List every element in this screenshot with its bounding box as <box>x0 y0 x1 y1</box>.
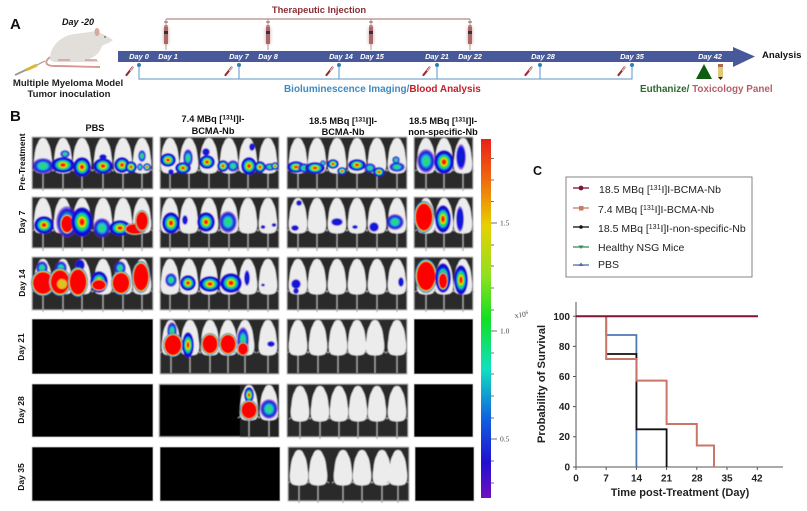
y axis title: Probability of Survival <box>536 325 548 443</box>
axis tick labels <box>553 312 763 484</box>
icon: rat with syringe <box>15 28 113 75</box>
PBS curve <box>606 316 636 467</box>
legend: I]I-BCMA-Nb <box>655 204 714 216</box>
imaging panel: non-specific pre-treatment <box>414 137 474 191</box>
colour scale bar: 1.0 <box>500 326 510 336</box>
colour scale bar: 0.5 <box>500 434 510 444</box>
timeline day labels: Day 42 <box>698 52 723 61</box>
imaging panel: 18.5 MBq day 21 <box>287 319 408 374</box>
imaging panel: PBS day 7 <box>32 197 153 251</box>
axis tick labels: 21 <box>661 474 672 484</box>
imaging panel: 7.4 MBq day 14 <box>159 257 279 312</box>
column headings: I]I- <box>233 114 244 124</box>
timeline arrow <box>118 47 755 67</box>
imaging panel: PBS day 35 <box>32 447 153 501</box>
timeline day labels: Day 15 <box>360 52 385 61</box>
column headings: BCMA-Nb <box>192 126 235 136</box>
imaging panel: PBS day 21 <box>32 319 153 374</box>
column headings: 18.5 MBq [ <box>309 116 355 126</box>
column headings: 7.4 MBq [ <box>182 114 222 124</box>
legend <box>566 177 752 277</box>
18.5 MBq curve <box>576 315 758 317</box>
imaging bracket <box>137 63 634 79</box>
icons: blood tubes <box>126 67 625 75</box>
model caption: Multiple Myeloma Model <box>13 78 123 89</box>
colour scale bar: x10 <box>514 310 526 320</box>
axis tick labels: 0 <box>573 474 579 484</box>
timeline day labels: Day 21 <box>425 52 449 61</box>
column headings: BCMA-Nb <box>322 127 365 137</box>
survival chart <box>536 302 783 499</box>
timeline day labels: Day 1 <box>158 52 178 61</box>
imaging panel: 18.5 MBq day 14 <box>287 257 408 312</box>
imaging panel: 7.4 MBq day 28 <box>159 384 280 438</box>
7.4 MBq curve <box>606 316 714 467</box>
legend: 7.4 MBq [ <box>598 204 643 216</box>
row labels: Day 35 <box>16 463 26 491</box>
column headings <box>86 114 478 137</box>
axis tick labels: 80 <box>559 342 570 353</box>
axis tick labels: 100 <box>553 312 570 323</box>
analysis label: Analysis <box>762 50 801 61</box>
axis tick labels: 0 <box>564 462 570 474</box>
imaging panel: 7.4 MBq pre-treatment <box>159 137 279 191</box>
axis tick labels: 7 <box>603 474 609 484</box>
euthanize toxicology caption: Euthanize/ Toxicology Panel <box>640 84 773 95</box>
model caption: Tumor inoculation <box>28 89 111 100</box>
column headings: 131 <box>355 116 366 124</box>
column headings: I]I- <box>366 116 377 126</box>
timeline day labels: Day 0 <box>129 52 150 61</box>
therapeutic injection heading: Therapeutic Injection <box>272 4 366 15</box>
imaging panel: non-specific day 21 <box>414 319 473 374</box>
imaging panel: non-specific day 14 <box>414 257 474 312</box>
label A: A <box>10 16 21 33</box>
imaging panel: 18.5 MBq day 35 <box>288 447 409 503</box>
timeline day labels <box>129 52 723 61</box>
imaging panel: non-specific day 28 <box>414 384 473 437</box>
imaging panel: 7.4 MBq day 35 <box>160 447 280 501</box>
imaging panel: 18.5 MBq day 7 <box>287 197 408 251</box>
axis tick labels: 60 <box>559 372 570 383</box>
column headings: non-specific-Nb <box>408 127 478 137</box>
axis tick labels: 28 <box>691 474 703 484</box>
day -20 label: Day -20 <box>62 17 94 27</box>
imaging panel: 7.4 MBq day 21 <box>160 319 279 374</box>
row labels <box>16 133 27 491</box>
axis tick labels: 20 <box>559 432 570 443</box>
row labels: Pre-Treatment <box>17 133 27 191</box>
legend: PBS <box>598 259 619 271</box>
timeline day labels: Day 14 <box>329 52 353 61</box>
column headings: PBS <box>86 123 104 133</box>
legend: 18.5 MBq [ <box>598 223 649 235</box>
icon: toxicology tube <box>718 64 723 80</box>
row labels: Day 7 <box>17 210 27 233</box>
row labels: Day 14 <box>17 269 27 297</box>
label C: C <box>533 164 542 178</box>
column headings: 131 <box>222 114 234 122</box>
column headings: I]I- <box>466 116 477 126</box>
imaging panel: PBS day 14 <box>31 257 153 312</box>
imaging panel: 7.4 MBq day 7 <box>159 197 279 251</box>
icon: euthanize triangle <box>696 64 712 79</box>
legend: I]I-BCMA-Nb <box>661 184 721 196</box>
timeline day labels: Day 35 <box>620 52 645 61</box>
timeline day labels: Day 28 <box>531 52 556 61</box>
axis tick labels: 40 <box>559 402 570 413</box>
legend: 18.5 MBq [ <box>599 184 650 196</box>
row labels: Day 21 <box>16 333 26 361</box>
column headings: 18.5 MBq [ <box>409 116 455 126</box>
legend: 131 <box>650 185 662 192</box>
label B: B <box>10 108 21 125</box>
legend: Healthy NSG Mice <box>598 242 685 254</box>
timeline day labels: Day 22 <box>458 52 483 61</box>
imaging panel: non-specific day 7 <box>414 197 474 251</box>
non-specific curve <box>606 354 667 467</box>
imaging and blood caption: Bioluminescence Imaging/Blood Analysis <box>284 84 481 95</box>
axis tick labels: 14 <box>631 474 642 484</box>
colour scale bar: 6 <box>525 311 529 316</box>
imaging panel: PBS pre-treatment <box>32 137 153 191</box>
imaging panel: 18.5 MBq day 28 <box>287 384 408 439</box>
timeline day labels: Day 8 <box>258 52 279 61</box>
axis tick labels: 42 <box>751 474 763 484</box>
colour scale bar <box>481 139 529 498</box>
imaging panel: 18.5 MBq pre-treatment <box>287 137 408 191</box>
row labels: Day 28 <box>16 396 26 424</box>
x axis title: Time post-Treatment (Day) <box>611 487 750 499</box>
legend: 131 <box>643 205 655 212</box>
legend: 131 <box>649 224 661 231</box>
timeline day labels: Day 7 <box>229 52 250 61</box>
axis tick labels: 35 <box>721 474 733 484</box>
imaging panel: non-specific day 35 <box>415 447 474 501</box>
model caption <box>13 78 123 100</box>
imaging panel: PBS day 28 <box>32 384 153 437</box>
legend: I]I-non-specific-Nb <box>660 223 746 235</box>
injection bracket with syringes <box>164 19 472 50</box>
column headings: 131 <box>455 116 466 124</box>
colour scale bar: 1.5 <box>500 218 510 228</box>
